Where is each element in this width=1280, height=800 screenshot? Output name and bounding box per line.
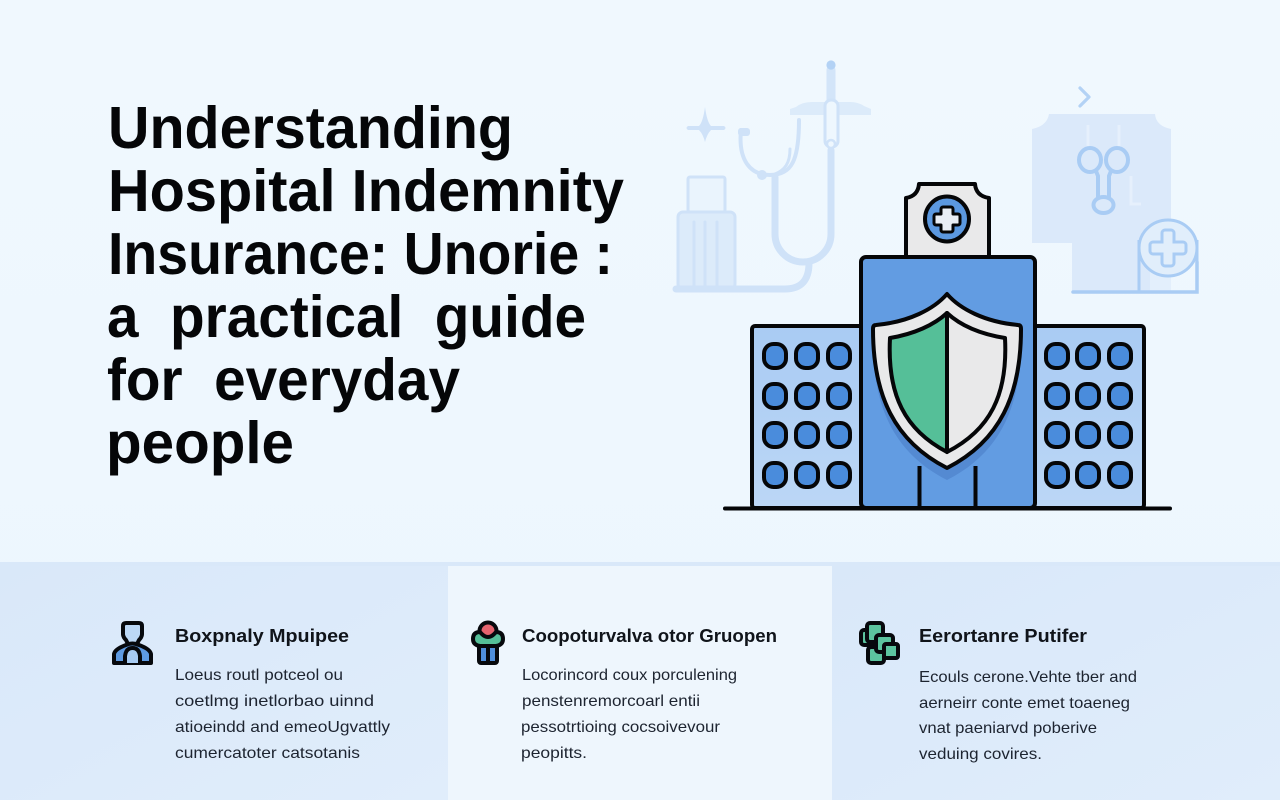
ground line [725, 506, 1170, 510]
title: a practical guide [107, 284, 586, 350]
heading: Boxpnaly Mpuipee [175, 626, 349, 646]
body text: aerneirr conte emet toaeneg [919, 695, 1130, 712]
body text [521, 667, 737, 762]
body text: coetlmg inetlorbao uinnd [175, 693, 374, 710]
body text [919, 669, 1137, 763]
body text: veduing covires. [919, 746, 1042, 763]
icon: person [114, 623, 151, 663]
door lines [920, 466, 976, 508]
bottom band [0, 562, 1280, 800]
title: Insurance: Unorie : [108, 221, 613, 287]
feature 3 [861, 623, 1137, 763]
title [106, 95, 624, 476]
icon: organ [1079, 148, 1128, 213]
icon: chevron [1080, 88, 1089, 106]
title: Hospital Indemnity [108, 158, 624, 224]
background icon: document with organ and medical cross [1032, 88, 1197, 293]
hospital illustration [725, 184, 1170, 508]
heading: Eerortanre Putifer [919, 626, 1087, 646]
title: for everyday [107, 347, 460, 413]
icon: stacked blocks [861, 623, 898, 663]
right wing [1034, 326, 1144, 508]
left wing windows [764, 344, 850, 487]
body text: atioeindd and emeoUgvattly [175, 719, 390, 736]
body text [175, 667, 390, 762]
hospital sign [906, 184, 989, 257]
shield [873, 294, 1021, 480]
body text: peopitts. [521, 745, 587, 762]
icon: cross badge [1073, 220, 1197, 292]
icon: stethoscope [738, 120, 831, 262]
icon: figure [473, 622, 503, 663]
feature 2 [473, 622, 777, 762]
right wing windows [1046, 344, 1131, 487]
body text: vnat paeniarvd poberive [919, 720, 1097, 737]
left wing [752, 326, 862, 508]
feature 1 [114, 623, 390, 762]
icon: sign cross [925, 196, 969, 242]
background icon: medical equipment and stethoscope [676, 60, 871, 289]
panel: middle [448, 566, 832, 800]
icon: suitcase [678, 177, 735, 289]
icon: stethoscope tube [676, 263, 809, 289]
body text: penstenremorcoarl entii [522, 693, 700, 710]
central tower [861, 257, 1035, 508]
heading: Coopoturvalva otor Gruopen [522, 626, 777, 646]
icon: stethoscope head [790, 60, 871, 148]
body text: pessotrtioing cocsoivevour [521, 719, 721, 736]
icon: sparkle [686, 107, 726, 142]
panel: left [0, 566, 448, 800]
document sheet [1032, 114, 1171, 293]
panel: right [832, 566, 1280, 800]
body text: cumercatoter catsotanis [175, 745, 360, 762]
title: Understanding [108, 95, 513, 161]
body text: Locorincord coux porculening [522, 667, 737, 684]
title: people [106, 410, 294, 476]
body text: Loeus routl potceol ou [175, 667, 343, 684]
body text: Ecouls cerone.Vehte tber and [919, 669, 1137, 686]
